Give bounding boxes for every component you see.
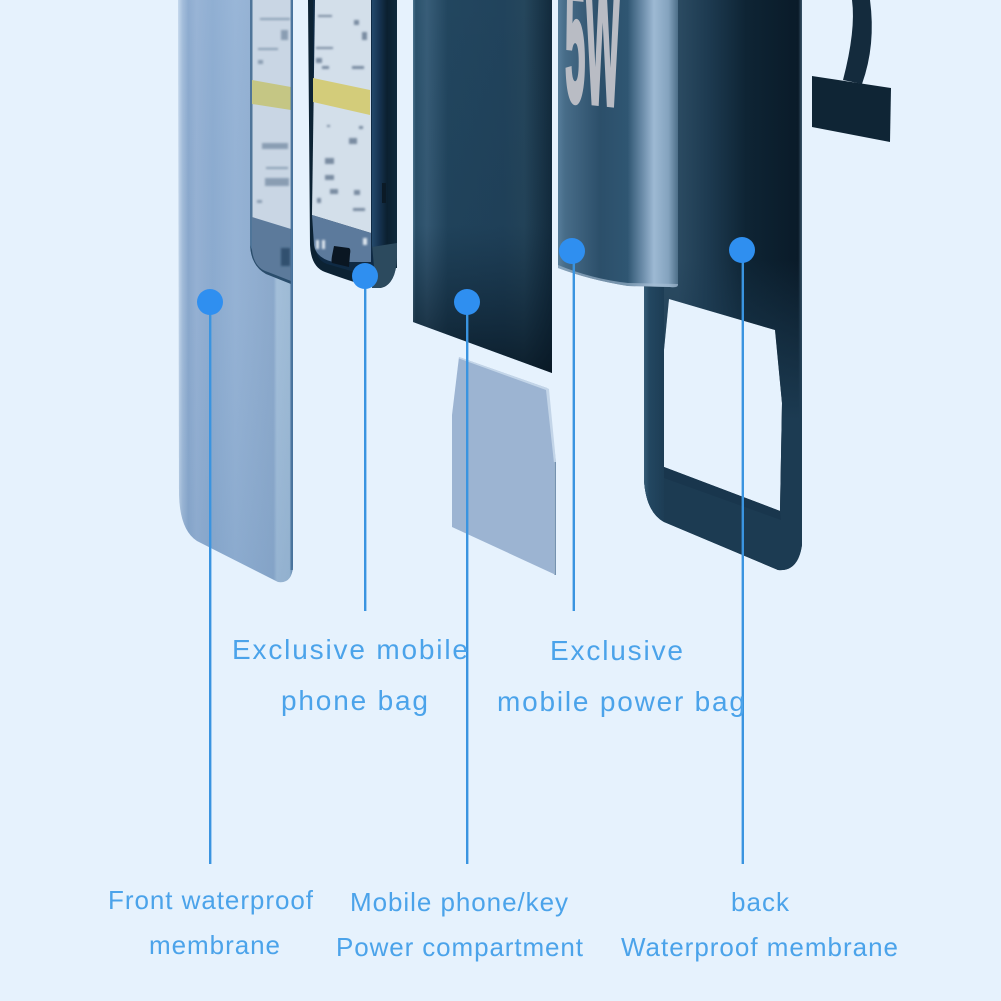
label: front waterproof membrane: Front waterproof xyxy=(108,885,314,915)
phone screen xyxy=(312,0,371,262)
label: exclusive mobile power bag: mobile power bag xyxy=(497,686,745,717)
label: exclusive mobile phone bag xyxy=(232,634,468,716)
phone seen through the membrane xyxy=(250,0,291,290)
label: front waterproof membrane xyxy=(108,885,314,960)
home key xyxy=(332,246,350,267)
label: mobile phone/key power compartment: Power compartment xyxy=(336,932,584,962)
label: back waterproof membrane xyxy=(621,887,898,962)
leader line: back membrane xyxy=(729,237,755,864)
back waterproof membrane xyxy=(644,0,802,570)
small compartment sheet xyxy=(452,357,556,575)
label: exclusive mobile power bag xyxy=(497,635,745,717)
front waterproof membrane xyxy=(178,0,293,582)
power bank xyxy=(558,0,678,287)
leader line: front membrane xyxy=(197,289,223,864)
label: front waterproof membrane: membrane xyxy=(149,930,280,960)
label: exclusive mobile phone bag: Exclusive mobile xyxy=(232,634,468,665)
label: back waterproof membrane: back xyxy=(731,887,790,917)
label: mobile phone/key power compartment: Mobile phone/key xyxy=(350,887,568,917)
power bank cable and connector xyxy=(812,0,891,142)
mobile power bag pouch xyxy=(413,0,552,373)
leader line: phone bag xyxy=(352,263,378,611)
label: back waterproof membrane: Waterproof membrane xyxy=(621,932,898,962)
leader line: power bag xyxy=(559,238,585,611)
exclusive mobile phone bag: phone xyxy=(308,0,397,288)
leader line: phone/key compartment xyxy=(454,289,480,864)
exploded product diagram xyxy=(110,0,897,962)
label: exclusive mobile power bag: Exclusive xyxy=(550,635,683,666)
label: exclusive mobile phone bag: phone bag xyxy=(281,685,428,716)
label: mobile phone/key power compartment xyxy=(336,887,584,962)
